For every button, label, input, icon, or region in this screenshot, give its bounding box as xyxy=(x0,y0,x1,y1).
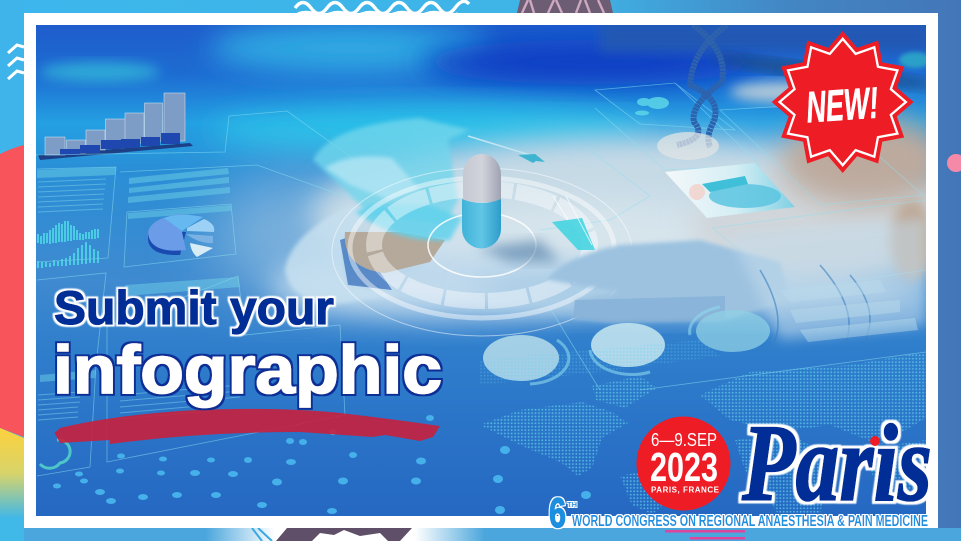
location: PARIS, FRANCE xyxy=(651,486,720,494)
ordinal 6: 6 xyxy=(549,489,566,536)
left yellow shape xyxy=(0,428,24,541)
right pink dot xyxy=(947,154,961,172)
NEW text: NEW! xyxy=(805,79,880,132)
small panel header bars xyxy=(37,167,240,382)
year: 2023 xyxy=(650,444,718,490)
lower left panel ring xyxy=(40,440,70,468)
heading: Submit your: Submit your xyxy=(54,281,334,334)
3D bar chart xyxy=(38,93,193,160)
red brush stroke xyxy=(54,409,440,444)
bottom pink lines xyxy=(665,530,745,540)
surgeon figure xyxy=(285,118,470,305)
mini bar charts xyxy=(38,221,98,268)
glove hand right xyxy=(548,218,926,350)
top wave decoration xyxy=(295,1,469,16)
bottom torn white and tower xyxy=(205,528,485,541)
heading: infographic: infographic xyxy=(53,332,442,408)
floating donut charts xyxy=(483,307,770,384)
scattered light dots xyxy=(53,415,591,514)
left panel text lines xyxy=(38,179,240,420)
pipette xyxy=(468,136,545,163)
DNA dish xyxy=(657,132,719,160)
right progress bars xyxy=(790,282,918,342)
date range: 6—9.SEP xyxy=(651,430,717,450)
cell icon panel xyxy=(665,163,795,218)
left white chevrons xyxy=(8,45,24,79)
capsule shadow xyxy=(478,240,560,262)
dotted world map xyxy=(480,340,926,516)
thin interface panel outlines xyxy=(36,83,926,476)
test tube xyxy=(552,196,595,250)
congress title xyxy=(549,489,928,536)
soft colour fields xyxy=(40,20,961,319)
DNA helix xyxy=(677,25,727,147)
pill capsule xyxy=(462,154,501,249)
ordinal suffix: TH xyxy=(567,502,577,509)
top Eiffel tower fragment xyxy=(517,0,613,13)
dial rings xyxy=(332,168,632,336)
date badge xyxy=(636,416,730,510)
small cell dots xyxy=(635,97,669,116)
pie chart xyxy=(148,214,214,257)
NEW badge xyxy=(772,31,914,173)
left red shape xyxy=(0,145,24,437)
